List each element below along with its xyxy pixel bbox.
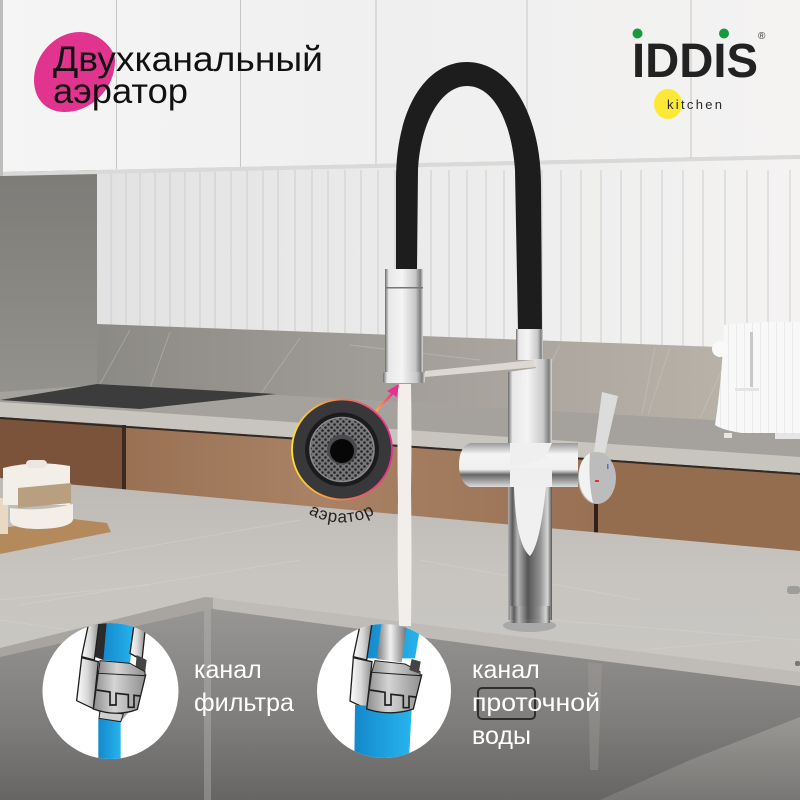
teapot on wooden tray	[0, 460, 111, 554]
label: flow water channel: проточной	[472, 689, 600, 717]
sink interior	[0, 608, 800, 800]
label: filter channel: канал	[194, 656, 262, 684]
front counter surface	[0, 478, 800, 680]
label: flow water channel: канал	[472, 656, 540, 684]
faucet	[383, 62, 618, 632]
logo: IDDIS kitchen: ®	[758, 31, 766, 42]
cooktop	[0, 384, 276, 409]
water stream	[398, 384, 412, 626]
upper counter surface	[0, 385, 800, 458]
callout arrow to aerator	[376, 384, 399, 411]
handle disc	[578, 452, 616, 504]
black flexible hose	[396, 62, 542, 331]
hose collar	[516, 329, 543, 360]
marble backsplash	[97, 324, 800, 425]
title: аэратор	[53, 72, 188, 111]
wooden cabinet fronts	[0, 417, 800, 553]
faucet cross body	[459, 443, 578, 487]
far-right chrome fittings	[787, 586, 800, 666]
right circle: flow water channel diagram	[317, 622, 451, 760]
label: flow water channel: воды	[472, 722, 531, 750]
lever handle	[594, 392, 618, 453]
aerator label: аэратор	[310, 506, 373, 525]
title accent blob	[34, 32, 115, 112]
aerator close-up	[292, 400, 392, 500]
left circle: filter channel diagram	[42, 623, 178, 760]
beadboard panel	[97, 155, 800, 352]
title: Двухканальный	[53, 40, 323, 79]
title	[53, 40, 323, 111]
logo: IDDIS kitchen	[632, 28, 766, 119]
faucet body upper tube	[508, 359, 552, 455]
kettle	[712, 322, 800, 439]
label: filter channel	[194, 656, 294, 717]
sink front counter edge	[0, 597, 800, 686]
faucet lower tube	[503, 487, 556, 632]
spout arm	[425, 360, 537, 377]
logo: IDDIS kitchen: kitchen	[667, 97, 724, 112]
label: filter channel: фильтра	[194, 689, 294, 717]
label: flow water channel	[472, 656, 600, 750]
upper white cabinets	[0, 0, 800, 176]
upper counter edge	[0, 402, 800, 473]
left wall	[0, 165, 100, 405]
chrome spout sleeve	[383, 269, 425, 383]
logo: IDDIS kitchen: IDDIS	[632, 35, 758, 88]
